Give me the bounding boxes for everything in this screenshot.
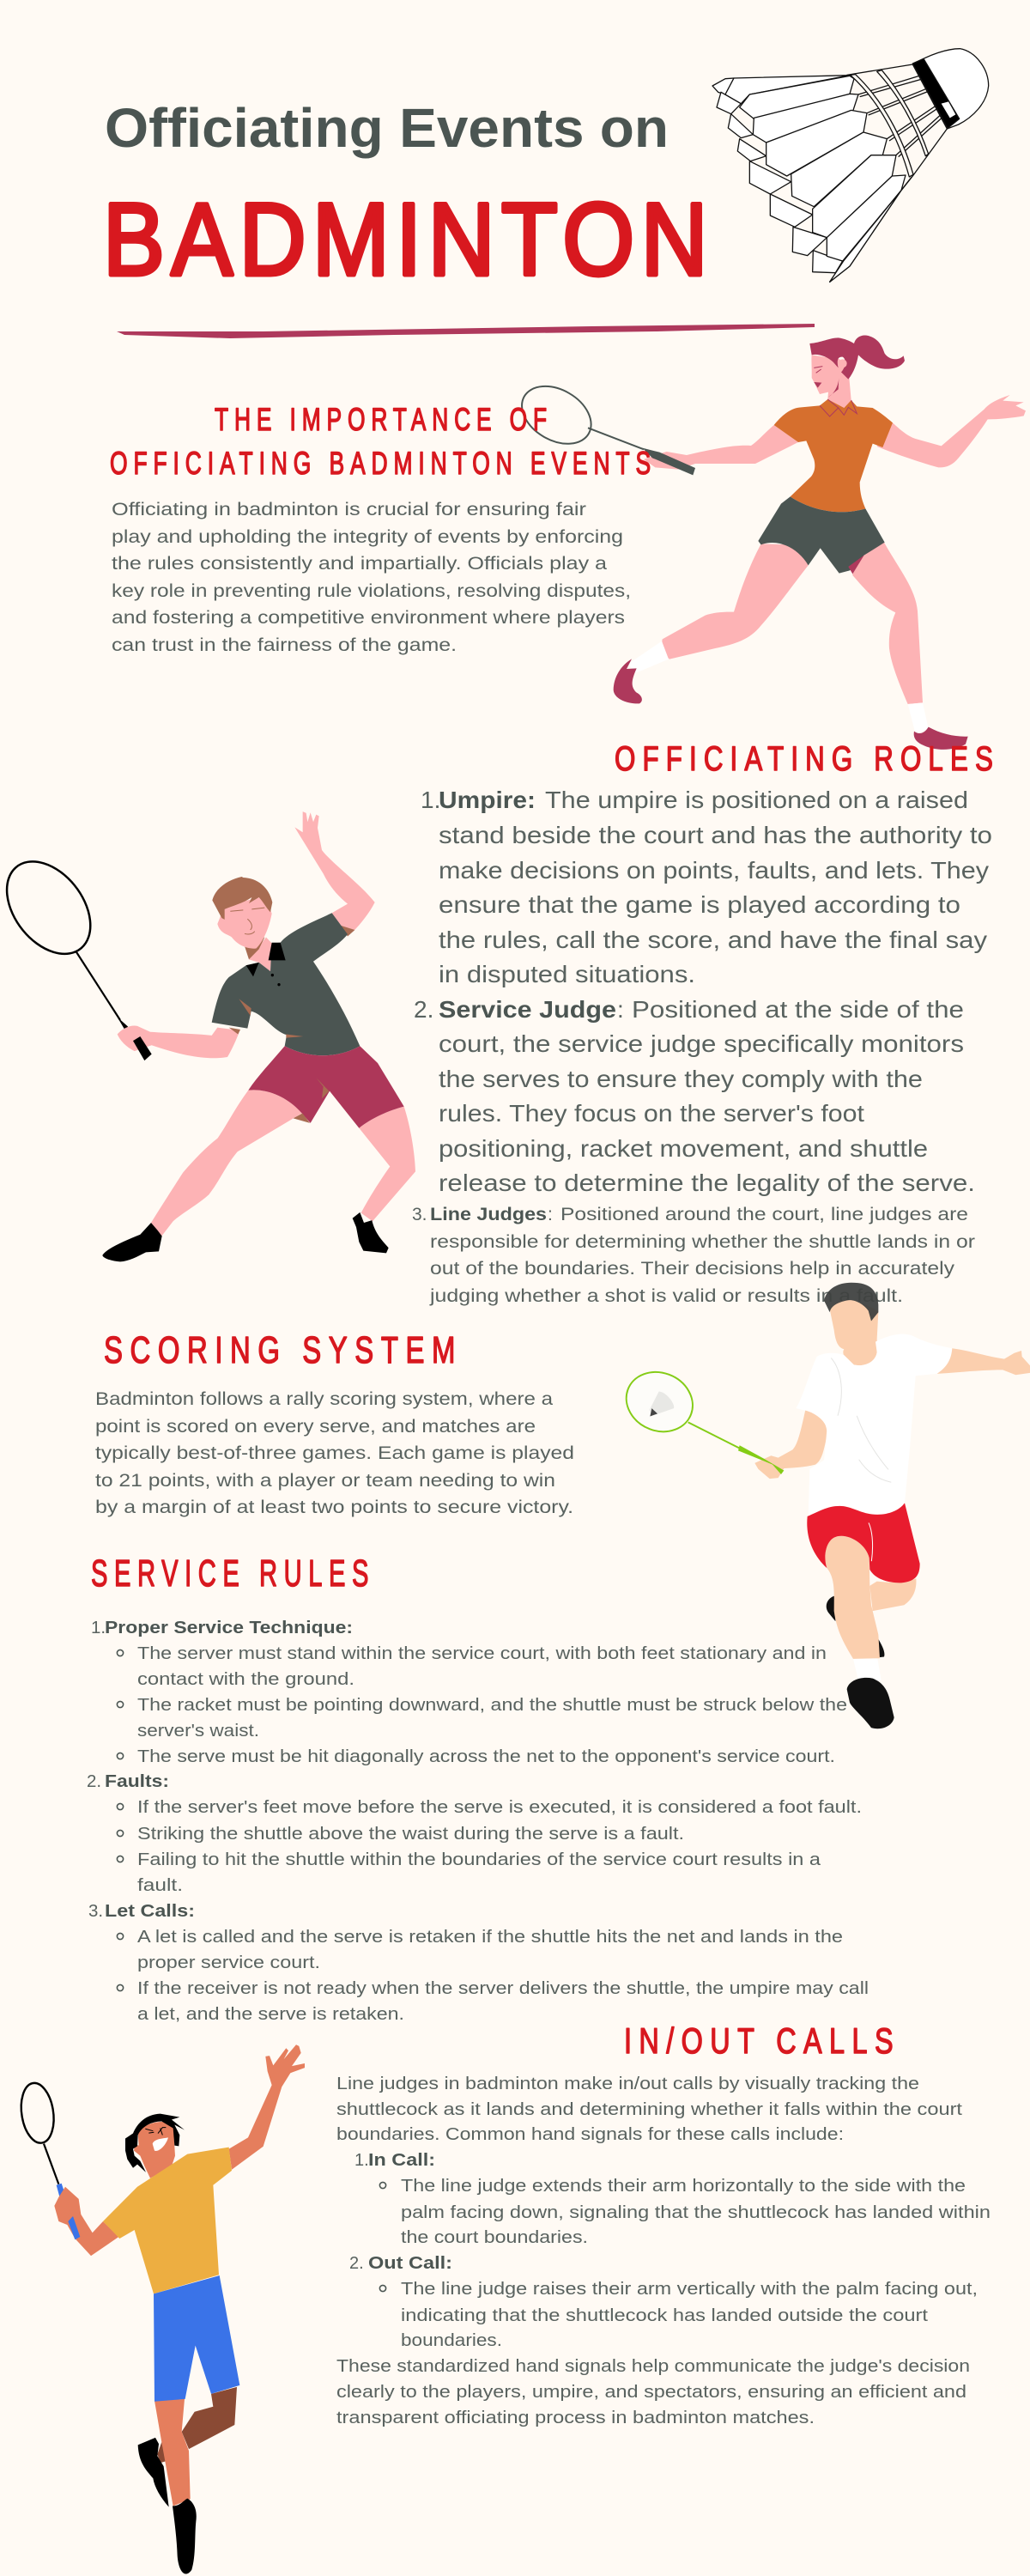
shorts seam — [869, 1522, 873, 1561]
rule 1: proper service technique: 1. — [91, 1618, 106, 1637]
lower tip scales — [712, 78, 734, 94]
head and neck — [134, 2122, 175, 2178]
role 2: service judge: rules. They focus on the server's foot — [439, 1100, 864, 1127]
head and neck — [830, 1300, 878, 1365]
role 1: umpire: stand beside the court and has the authority to — [439, 822, 992, 848]
rule 1: proper service technique: The server must stand within the service court, with both feet stationary and in — [137, 1643, 827, 1663]
out call: indicating that the shuttlecock has landed outside the court — [401, 2306, 929, 2325]
paragraph: importance: the rules consistently and impartially. Officials play a — [112, 554, 607, 574]
rule 1: proper service technique: contact with the ground. — [137, 1669, 354, 1689]
shuttle in racket — [650, 1392, 674, 1416]
role 3: line judges: Positioned around the court, line judges are — [560, 1205, 968, 1224]
ponytail hair — [809, 336, 905, 380]
rule 3: let calls — [88, 1901, 869, 2024]
shorts — [248, 1046, 404, 1128]
role 1: umpire: in disputed situations. — [439, 961, 695, 987]
role 1: umpire: Umpire: — [439, 787, 536, 813]
role 3: line judges: responsible for determining whether the shuttle lands in or — [430, 1232, 975, 1252]
orange shirt — [774, 399, 893, 512]
right arm and hand — [937, 1348, 1030, 1375]
hair — [824, 1283, 878, 1321]
role 3: line judges — [412, 1205, 975, 1306]
title — [103, 97, 714, 297]
rule 2: faults: Striking the shuttle above the waist during the serve is a fault. — [137, 1824, 684, 1844]
eye — [814, 367, 822, 373]
white shirt — [796, 1334, 952, 1516]
title line 1: Officiating Events on — [105, 97, 669, 159]
right leg — [359, 1107, 415, 1221]
shirt shadows — [239, 999, 303, 1038]
quills — [858, 75, 946, 157]
out call: Out Call: — [368, 2254, 452, 2273]
heading line 1: THE IMPORTANCE OF — [215, 402, 553, 437]
rule 2: faults: Faults: — [105, 1771, 169, 1791]
racket grip — [738, 1445, 784, 1474]
rule 2: faults: If the server's feet move before the serve is executed, it is considered a foot fault. — [137, 1797, 862, 1817]
paragraph: importance: can trust in the fairness of the game. — [112, 635, 457, 655]
paragraph: scoring system: to 21 points, with a player or team needing to win — [95, 1471, 555, 1491]
intro paragraph — [336, 2075, 963, 2144]
rule 2: faults: 2. — [87, 1771, 101, 1791]
head — [217, 896, 272, 949]
back arm and hand — [877, 395, 1026, 467]
front leg — [154, 2399, 191, 2506]
mouth — [814, 382, 821, 388]
role 1: umpire: ensure that the game is played according to — [439, 891, 960, 918]
skirt — [830, 64, 947, 282]
role 3: line judges: judging whether a shot is valid or results in a fault. — [429, 1286, 903, 1306]
text block: in/out calls — [336, 2075, 991, 2427]
shirt gap — [839, 400, 851, 408]
title line 2: BADMINTON — [103, 182, 714, 297]
racket — [618, 1363, 740, 1449]
sleeve shadow — [229, 1028, 240, 1035]
shorts — [758, 496, 885, 574]
role 2: service judge: 2. — [414, 996, 433, 1023]
mouth — [153, 2137, 168, 2151]
rule 2: faults: fault. — [137, 1875, 183, 1895]
role 2: service judge: court, the service judge specifically monitors — [439, 1030, 964, 1057]
inner shorts — [848, 556, 864, 574]
role 3: line judges: : — [548, 1205, 553, 1224]
heading: service rules: SERVICE RULES — [91, 1552, 375, 1595]
paragraph: scoring system: by a margin of at least two points to secure victory. — [95, 1498, 573, 1517]
racket — [0, 845, 140, 1044]
sock — [853, 1656, 882, 1680]
racket grip — [642, 448, 695, 475]
in call: The line judge extends their arm horizontally to the side with the — [401, 2177, 966, 2196]
paragraph: scoring system: Badminton follows a rally scoring system, where a — [95, 1389, 553, 1409]
paragraph: importance: play and upholding the integrity of events by enforcing — [112, 527, 623, 547]
in call: In Call: — [368, 2151, 435, 2170]
front shoe — [173, 2499, 197, 2574]
back leg — [157, 2387, 237, 2463]
role 2: service judge: Service Judge — [439, 996, 616, 1023]
front shoe — [847, 1678, 894, 1728]
intro paragraph: Line judges in badminton make in/out calls by visually tracking the — [336, 2075, 919, 2093]
neck shadow — [245, 938, 264, 959]
closing paragraph — [336, 2357, 970, 2427]
bands — [851, 70, 929, 177]
role 2: service judge: the serves to ensure they comply with the — [439, 1066, 923, 1092]
red shorts — [807, 1503, 920, 1583]
neck and face — [811, 355, 851, 415]
main feathers — [725, 76, 850, 104]
face lines — [230, 908, 264, 934]
paragraph: importance: Officiating in badminton is crucial for ensuring fair — [112, 500, 586, 519]
back sock — [908, 702, 929, 734]
front leg — [662, 544, 813, 659]
rule 3: let calls: If the receiver is not ready when the server delivers the shuttle, the umpire may call — [137, 1978, 869, 1998]
icon: shuttlecock — [712, 49, 989, 282]
collar — [246, 943, 286, 976]
ear — [839, 359, 847, 368]
list: service rules — [87, 1618, 869, 2024]
role 1: umpire: the rules, call the score, and have the final say — [439, 927, 987, 953]
front sock — [628, 641, 669, 672]
out call: 2. — [349, 2254, 364, 2273]
in call: the court boundaries. — [401, 2228, 588, 2247]
back shoe — [914, 727, 968, 750]
back shoe — [138, 2438, 169, 2507]
paragraph: importance: key role in preventing rule violations, resolving disputes, — [112, 581, 631, 601]
back leg — [852, 543, 923, 704]
blue shorts — [154, 2275, 239, 2402]
racket grip lower — [68, 2216, 80, 2239]
rule 1: proper service technique: Proper Service Technique: — [105, 1618, 353, 1637]
role 1: umpire: 1. — [421, 787, 440, 813]
closing paragraph: clearly to the players, umpire, and spectators, ensuring an efficient and — [336, 2383, 966, 2402]
divider stroke — [117, 324, 815, 338]
role 3: line judges: 3. — [412, 1205, 427, 1224]
heading: scoring system: SCORING SYSTEM — [104, 1329, 463, 1371]
black band — [912, 58, 960, 128]
role 1: umpire: make decisions on points, faults, and lets. They — [439, 857, 989, 884]
back shoe — [827, 1595, 884, 1658]
heading: the importance — [110, 402, 657, 481]
lower arm and hand — [118, 1025, 239, 1058]
paragraph: importance: and fostering a competitive environment where players — [112, 608, 625, 628]
front leg — [825, 1536, 880, 1659]
in call: 1. — [354, 2151, 369, 2170]
role 2: service judge: positioning, racket movement, and shuttle — [439, 1135, 928, 1162]
paragraph: scoring system: typically best-of-three games. Each game is played — [95, 1443, 574, 1463]
rule 1: proper service technique: server's waist. — [137, 1721, 259, 1741]
rule 1: proper service technique: The racket must be pointing downward, and the shuttle must be struck below the — [137, 1695, 847, 1715]
out call: The line judge raises their arm vertically with the palm facing out, — [401, 2280, 978, 2299]
list: officiating roles — [412, 787, 992, 1306]
intro paragraph: boundaries. Common hand signals for these calls include: — [336, 2125, 844, 2144]
rule 3: let calls: a let, and the serve is retaken. — [137, 2004, 404, 2024]
rule 3: let calls: proper service court. — [137, 1953, 320, 1972]
shoes — [102, 1212, 389, 1261]
illustration: man with grey shirt — [0, 811, 415, 1261]
heading: in/out calls: IN/OUT CALLS — [624, 2020, 900, 2061]
lower arm and hand — [54, 2187, 118, 2256]
shirt — [212, 913, 360, 1055]
racket grip upper — [57, 2184, 67, 2204]
raised arm and hand — [229, 2044, 305, 2170]
band window — [942, 101, 955, 118]
paragraph: scoring system: point is scored on every serve, and matches are — [95, 1417, 536, 1437]
eyes — [145, 2128, 166, 2136]
role 2: service judge: Positioned at the side of the — [632, 996, 964, 1023]
collar — [820, 399, 857, 416]
intro paragraph: shuttlecock as it lands and determining whether it falls within the court — [336, 2100, 963, 2119]
role 3: line judges: out of the boundaries. Their decisions help in accurately — [430, 1259, 955, 1279]
neck — [249, 938, 272, 971]
rule 3: let calls: 3. — [88, 1901, 103, 1921]
rule 3: let calls: A let is called and the serve is retaken if the shuttle hits the net and lands in the — [137, 1927, 843, 1947]
illustration: woman player — [512, 336, 1026, 750]
rule 1: proper service technique: The serve must be hit diagonally across the net to the opponent's service court. — [137, 1747, 835, 1766]
left leg — [151, 1090, 302, 1236]
rule 1: proper service technique — [91, 1618, 847, 1766]
out call — [349, 2254, 978, 2350]
role 2: service judge: release to determine the legality of the serve. — [439, 1170, 975, 1196]
role 3: line judges: Line Judges — [430, 1205, 547, 1224]
paragraph: scoring system — [95, 1389, 574, 1517]
closing paragraph: transparent officiating process in badminton matches. — [336, 2409, 815, 2427]
hair — [212, 877, 272, 920]
jaw shadow — [828, 378, 839, 397]
paragraph: importance — [112, 500, 631, 655]
shorts shadows — [294, 1078, 329, 1123]
front shoe — [614, 659, 642, 703]
heading line 2: OFFICIATING BADMINTON EVENTS — [110, 446, 657, 481]
racket grip end — [133, 1036, 152, 1060]
rule 2: faults — [87, 1771, 862, 1895]
shirt folds — [831, 1358, 891, 1482]
illustration: man in white shirt — [618, 1283, 1030, 1728]
role 1: umpire — [421, 787, 992, 987]
rule 3: let calls: Let Calls: — [105, 1901, 195, 1921]
rule 2: faults: Failing to hit the shuttle within the boundaries of the service court results in a — [137, 1850, 821, 1869]
racket — [17, 2080, 58, 2184]
role 2: service judge — [414, 996, 975, 1196]
closing paragraph: These standardized hand signals help communicate the judge's decision — [336, 2357, 970, 2376]
buttons — [271, 974, 281, 986]
racket — [512, 374, 644, 455]
hair — [125, 2114, 185, 2172]
left arm and hand — [754, 1410, 827, 1479]
illustration: man in yellow shirt — [17, 2044, 305, 2574]
in call — [354, 2151, 991, 2247]
out call: boundaries. — [401, 2331, 502, 2350]
back leg — [869, 1578, 916, 1611]
front arm — [644, 425, 798, 470]
raised arm — [294, 811, 375, 936]
role 2: service judge: : — [617, 996, 624, 1023]
arm shadow — [341, 926, 354, 937]
role 1: umpire: The umpire is positioned on a raised — [545, 787, 968, 813]
cork — [912, 49, 989, 129]
in call: palm facing down, signaling that the shuttlecock has landed within — [401, 2203, 991, 2222]
yellow shirt — [103, 2148, 232, 2293]
